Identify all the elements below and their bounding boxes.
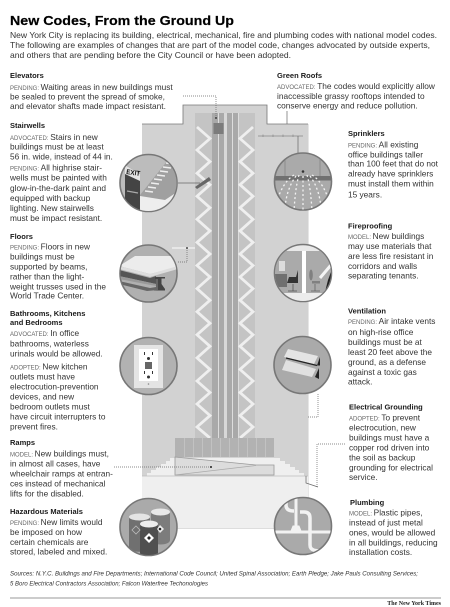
building cross-section	[142, 105, 309, 529]
panel: stairwells: ADVOCATED: Stairs in new	[10, 132, 99, 142]
panel: sprinklers: office buildings taller	[348, 149, 423, 159]
panel: electrical grounding: service.	[349, 472, 378, 482]
panel: fireproofing: corridors and walls	[348, 261, 417, 271]
panel: hazardous materials: stored, labeled and mixed.	[10, 547, 107, 557]
panel: plumbing: Plumbing	[350, 498, 385, 507]
panel: electrical grounding: grounding for electrical	[349, 463, 433, 473]
panel: plumbing: ones, would be allowed	[349, 528, 436, 538]
panel: bathrooms, kitchens and bedrooms: Bathrooms, Kitchens	[10, 309, 85, 318]
panel: bathrooms, kitchens and bedrooms: devices, and new	[10, 391, 75, 401]
sprinkler pipe in building	[258, 134, 303, 137]
panel: ventilation: ground, as a defense	[348, 357, 426, 367]
intro text: The following are examples of changes that are part of the model code, changes advocated by outside experts,	[10, 40, 430, 50]
panel: bathrooms, kitchens and bedrooms: ADVOCATED: In office	[10, 328, 80, 338]
panel: fireproofing: separating tenants.	[348, 270, 419, 280]
sources	[10, 571, 418, 587]
panel: floors: weight trusses used in the	[9, 281, 106, 291]
panel: ventilation: PENDING: Air intake vents	[348, 316, 435, 326]
panel: fireproofing: may use materials that	[348, 241, 432, 251]
icon: stairwell circle: EXIT	[126, 169, 141, 178]
panel: floors: supported by beams,	[10, 262, 87, 272]
leader lines	[114, 96, 345, 488]
stepped plinth	[147, 458, 304, 476]
panel: sprinklers: PENDING: All existing	[348, 139, 419, 149]
panel: fireproofing: MODEL: New buildings	[348, 231, 424, 241]
panel: sprinklers: 15 years.	[348, 189, 382, 199]
panel: sprinklers	[348, 129, 439, 199]
panel: ramps: MODEL: New buildings must,	[10, 449, 109, 459]
icon: hazardous barrels circle	[120, 498, 177, 557]
panel: electrical grounding: copper rod driven into	[349, 443, 430, 453]
sources: 5 Boro Electrical Contractors Association; Falcon Waterfree Techonologies	[10, 580, 208, 587]
panel: hazardous materials: Hazardous Materials	[10, 507, 83, 516]
panel: hazardous materials: PENDING: New limits would	[10, 517, 103, 527]
ramp	[175, 457, 274, 475]
panel: floors: Floors	[10, 232, 33, 241]
intro text: New York City is replacing its building, electrical, mechanical, fire and plumbing codes with national model codes.	[10, 30, 437, 40]
panel: plumbing	[349, 498, 438, 557]
panel: sprinklers: Sprinklers	[348, 129, 385, 138]
sources: Sources: N.Y.C. Buildings and Fire Departments; International Code Council; United Spinal Association; Earth Pledge; Jake Pauls Consulting Services;	[10, 571, 418, 578]
panel: hazardous materials: certain chemicals are	[10, 537, 89, 547]
panel: bathrooms, kitchens and bedrooms: prevent fires.	[10, 421, 58, 431]
panel: ramps: in almost all cases, have	[10, 459, 101, 469]
panel: ventilation: attack.	[348, 376, 372, 386]
panel: fireproofing: Fireproofing	[348, 221, 393, 230]
panel: stairwells: equipped with backup	[10, 193, 91, 203]
core	[195, 113, 255, 438]
panel: electrical grounding: ADOPTED: To prevent	[349, 413, 421, 423]
icon: plumbing circle	[274, 498, 332, 554]
icon: stair fragment on core	[195, 177, 211, 189]
panel: ventilation: on high-rise office	[348, 327, 414, 337]
icon: floor beam circle	[119, 245, 178, 302]
panel: bathrooms, kitchens and bedrooms: and Bedrooms	[10, 318, 63, 327]
panel: plumbing: MODEL: Plastic pipes,	[349, 508, 423, 518]
panel: bathrooms, kitchens and bedrooms	[10, 309, 106, 431]
panel: stairwells	[9, 121, 113, 223]
panel: elevators: and elevator shafts made impact resistant.	[10, 101, 166, 111]
panel: floors: PENDING: Floors in new	[10, 242, 91, 252]
panel: electrical grounding: Electrical Grounding	[349, 402, 423, 411]
panel: green roofs: Green Roofs	[277, 71, 322, 80]
panel: floors: buildings must be	[10, 252, 75, 262]
panel: stairwells: lighting. New stairwells	[10, 203, 94, 213]
panel: fireproofing	[348, 221, 434, 280]
elevator car	[214, 123, 224, 134]
panel: ventilation: buildings must be at	[348, 337, 422, 347]
panel: bathrooms, kitchens and bedrooms: bathrooms, waterless	[10, 339, 89, 349]
panel: stairwells: Stairwells	[10, 121, 45, 130]
footer rule	[10, 598, 441, 599]
panel: green roofs: ADVOCATED: The codes would explicitly allow	[277, 81, 436, 91]
panel: ramps	[9, 438, 113, 498]
panel: bathrooms, kitchens and bedrooms: have circuit interrupters to	[10, 411, 106, 421]
intro text: and others that are pending before the City Council or have been adopted.	[10, 50, 291, 60]
credit: The New York Times	[387, 601, 442, 607]
panel: plumbing: instead of just metal	[349, 518, 423, 528]
panel: elevators	[10, 71, 173, 111]
panel: ramps: ces instead of mechanical	[10, 479, 106, 489]
panel: sprinklers: already have sprinklers	[348, 169, 433, 179]
panel: stairwells: wells must be painted with	[9, 173, 107, 183]
panel: stairwells: buildings must be at least	[10, 142, 104, 152]
panel: ventilation: Ventilation	[348, 306, 386, 315]
panel: ramps: wheelchair ramps at entran-	[9, 469, 113, 479]
panel: electrical grounding: the soil as backup	[349, 453, 416, 463]
panel: bathrooms, kitchens and bedrooms: electrocution-prevention	[10, 381, 99, 391]
panel: ramps: Ramps	[10, 438, 35, 447]
panel: floors: rather than the light-	[10, 271, 84, 281]
icon: ventilation circle	[274, 336, 331, 394]
basement	[142, 476, 308, 528]
panel: hazardous materials	[10, 507, 107, 557]
icon: fireproofing office circle	[274, 244, 334, 303]
panel: green roofs: conserve energy and reduce pollution.	[277, 100, 418, 110]
panel: ramps: lifts for the disabled.	[10, 488, 84, 498]
panel: bathrooms, kitchens and bedrooms: ADOPTED: New kitchen	[10, 361, 88, 371]
building body	[142, 105, 308, 476]
panel: fireproofing: are less fire resistant in	[348, 251, 434, 261]
panel: plumbing: installation costs.	[349, 547, 412, 557]
panel: green roofs	[277, 71, 436, 110]
elevator shafts	[212, 113, 238, 438]
panel: stairwells: 56 in. wide, instead of 44 in.	[10, 152, 113, 162]
panel: elevators: Elevators	[10, 71, 44, 80]
panel: stairwells: PENDING: All highrise stair-	[10, 162, 102, 172]
zigzag stairs	[197, 127, 210, 438]
panel: ventilation: against a toxic gas	[348, 367, 417, 377]
panel: floors: World Trade Center.	[10, 291, 84, 301]
panel: elevators: PENDING: Waiting areas in new buildings must	[10, 82, 173, 92]
icon: stairwell circle	[120, 154, 180, 212]
icon: sprinkler circle	[274, 153, 332, 210]
intro text	[10, 30, 437, 60]
panel: floors	[9, 232, 106, 301]
panel: sprinklers: must install them within	[348, 179, 434, 189]
panel: ventilation: least 20 feet above the	[348, 347, 432, 357]
panel: electrical grounding	[349, 402, 433, 482]
panel: hazardous materials: be imposed on how	[10, 527, 83, 537]
podium	[175, 438, 274, 457]
title: New Codes, From the Ground Up	[10, 13, 234, 28]
panel: ventilation	[348, 306, 435, 386]
panel: plumbing: in all buildings, reducing	[349, 538, 438, 548]
panel: sprinklers: than 100 feet that do not	[348, 159, 439, 169]
panel: bathrooms, kitchens and bedrooms: outlets must have	[10, 371, 75, 381]
panel: electrical grounding: electrocution, new	[349, 423, 417, 433]
panel: bathrooms, kitchens and bedrooms: urinals would be allowed.	[10, 349, 103, 359]
panel: electrical grounding: buildings must have a	[349, 433, 430, 443]
panel: green roofs: inaccessible grassy rooftops intended to	[277, 91, 425, 101]
panel: stairwells: glow-in-the-dark paint and	[10, 183, 106, 193]
icon: electrical outlet circle	[120, 338, 177, 394]
panel: stairwells: must be impact resistant.	[10, 213, 102, 223]
panel: elevators: be sealed to prevent the spread of smoke,	[10, 92, 165, 102]
panel: bathrooms, kitchens and bedrooms: bedroom outlets must	[10, 401, 90, 411]
